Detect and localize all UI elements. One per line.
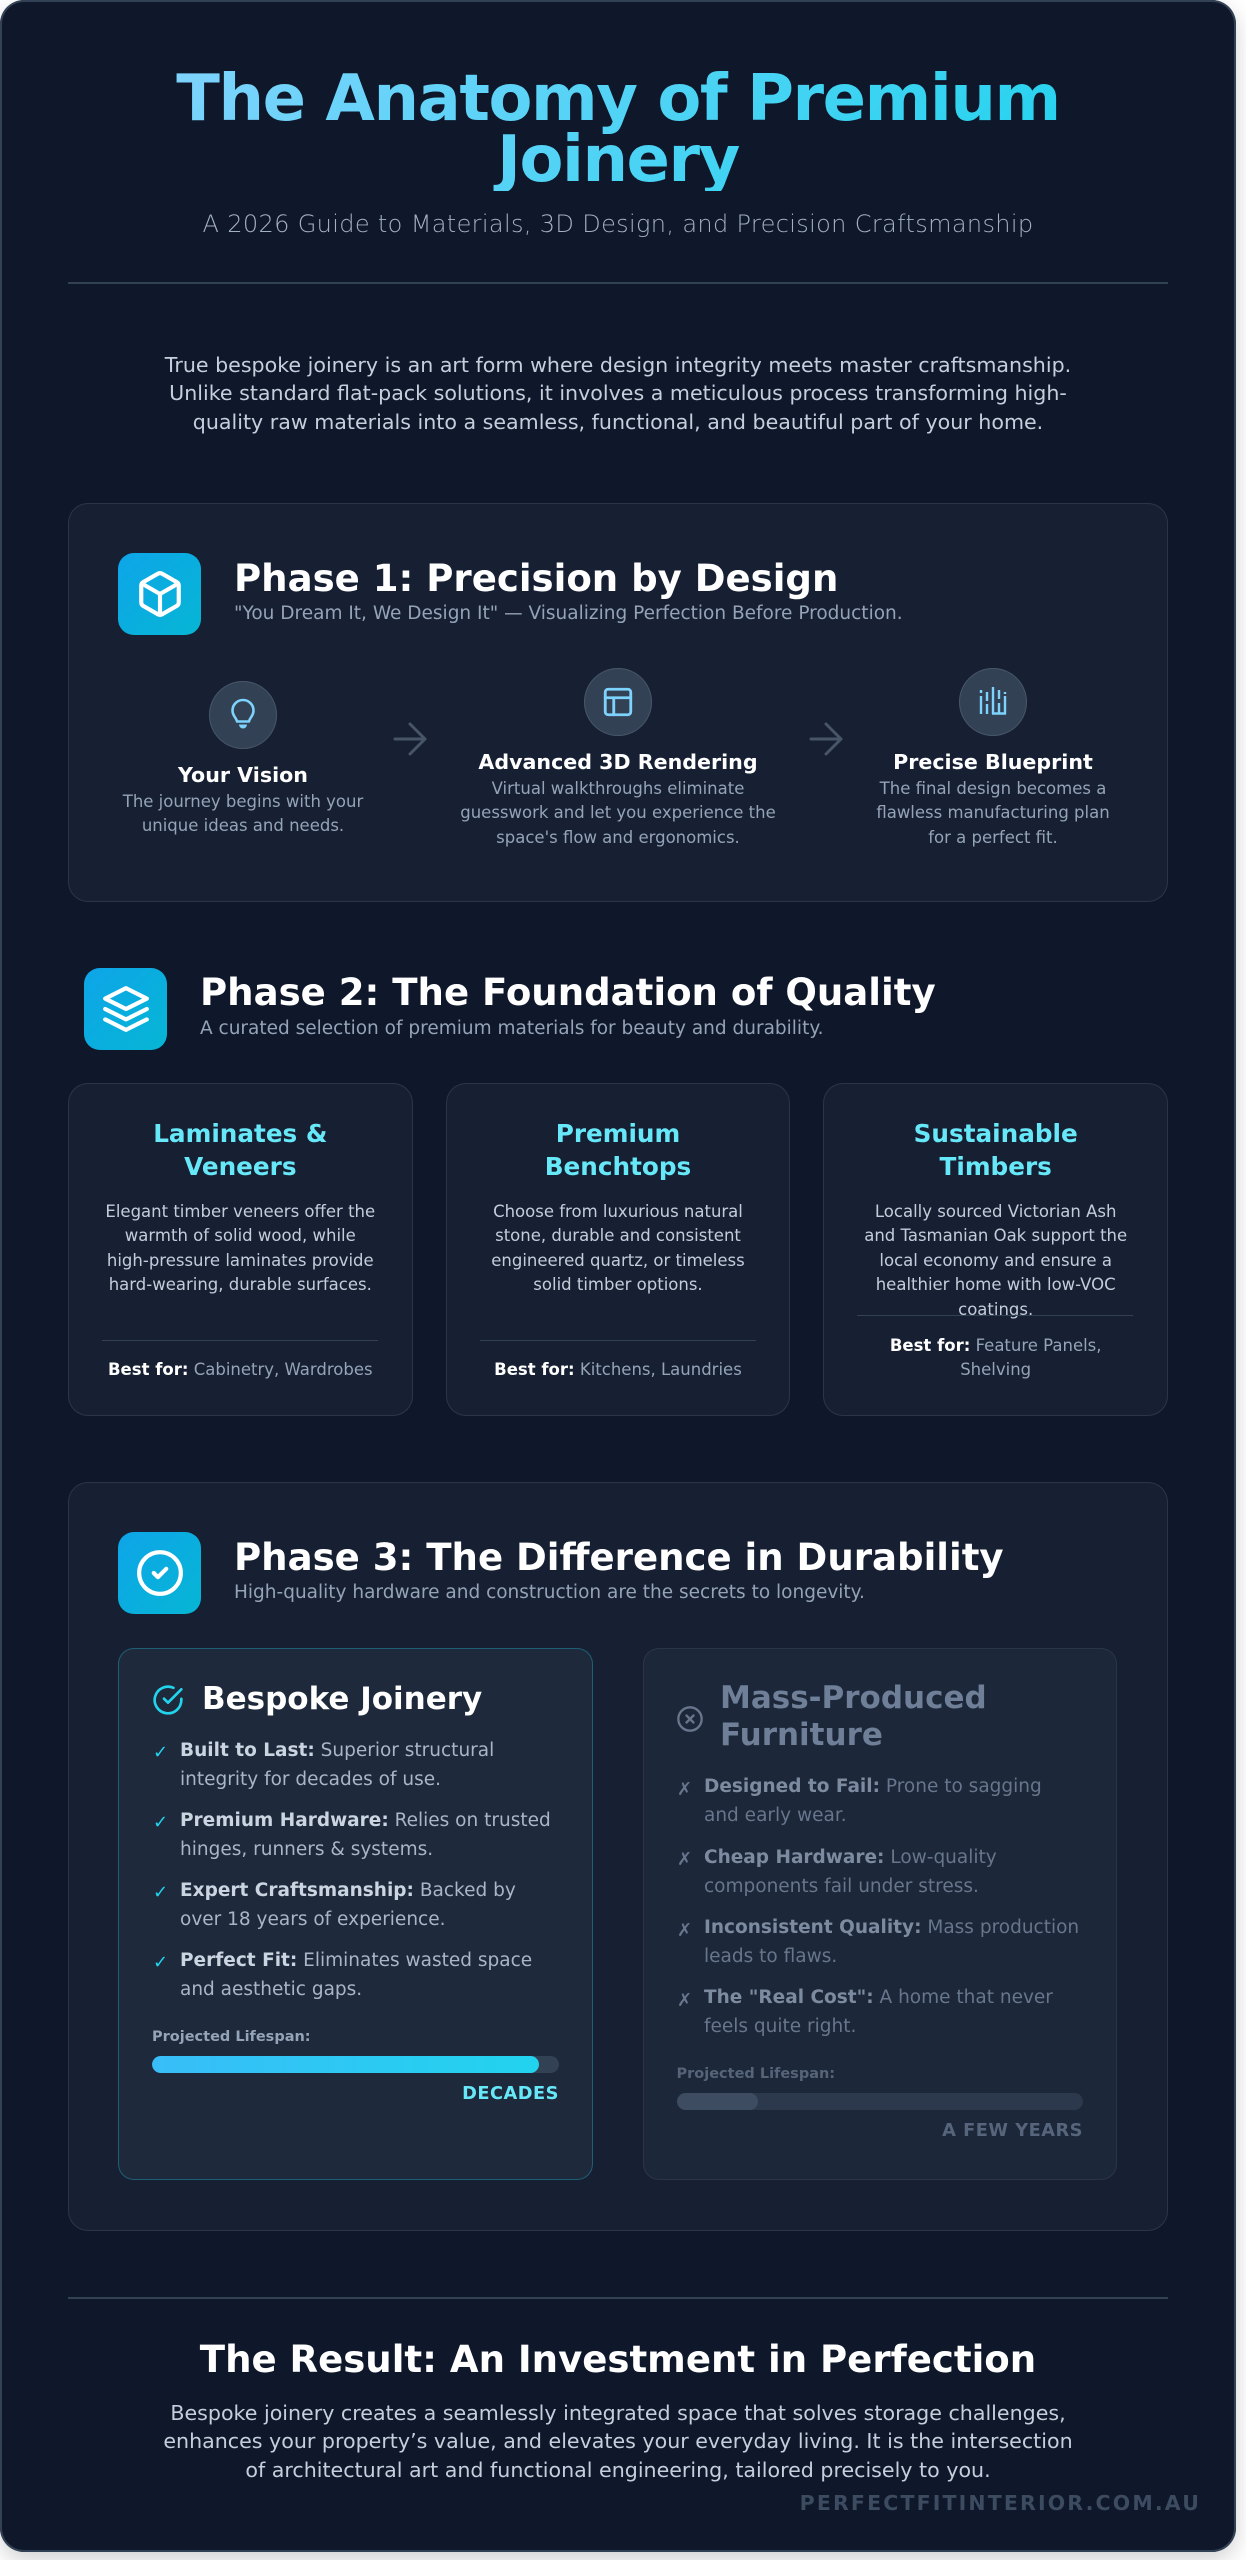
mass-produced list: ✗ (677, 1778, 692, 1800)
icon: check circle (118, 1532, 201, 1614)
icon: blueprint (959, 668, 1027, 736)
title (68, 69, 1168, 191)
phase 1 header (118, 553, 903, 635)
intro text: Unlike standard flat-pack solutions, it involves a meticulous process transforming high- (169, 381, 1067, 405)
step description (460, 779, 776, 847)
conclusion text (163, 2400, 1073, 2482)
card description: warmth of solid wood, while (125, 1226, 356, 1245)
card title (914, 1119, 1078, 1181)
bespoke list: integrity for decades of use. (180, 1769, 441, 1790)
card description: high-pressure laminates provide (107, 1251, 374, 1270)
intro text (164, 352, 1071, 434)
conclusion text: Bespoke joinery creates a seamlessly integrated space that solves storage challenges, (170, 2400, 1066, 2424)
card description: engineered quartz, or timeless (491, 1251, 745, 1270)
card title (545, 1119, 691, 1181)
lifespan bar (152, 2056, 559, 2073)
card description: solid timber options. (533, 1275, 703, 1294)
step description (122, 792, 364, 835)
list item (153, 1810, 551, 1860)
phase 3 subheading: High-quality hardware and construction are the secrets to longevity. (234, 1582, 865, 1603)
title: Joinery (497, 123, 739, 197)
icon: lightbulb (209, 681, 277, 749)
card description: stone, durable and consistent (495, 1226, 741, 1245)
panel: phase 3 (68, 1482, 1168, 2231)
bespoke list: over 18 years of experience. (180, 1909, 445, 1930)
step description: Virtual walkthroughs eliminate (492, 779, 744, 798)
best for: Best for: Feature Panels, (890, 1336, 1102, 1354)
mass-produced list: Cheap Hardware: Low-quality (704, 1847, 997, 1868)
card title: Timbers (940, 1152, 1052, 1181)
step description: unique ideas and needs. (142, 816, 344, 835)
step title: Advanced 3D Rendering (478, 750, 758, 774)
mass-produced heading: Furniture (720, 1717, 883, 1753)
list item (677, 1987, 1053, 2037)
list item (153, 1740, 494, 1790)
step description: for a perfect fit. (928, 828, 1058, 847)
website watermark: PERFECTFITINTERIOR.COM.AU (800, 2491, 1201, 2515)
card description: Locally sourced Victorian Ash (875, 1202, 1116, 1221)
step title: Your Vision (178, 763, 308, 787)
mass-produced list: leads to flaws. (704, 1946, 837, 1967)
lifespan bar (676, 2093, 1083, 2110)
bespoke list: ✓ (153, 1812, 168, 1833)
step description (876, 779, 1110, 847)
bespoke list: Built to Last: Superior structural (180, 1740, 494, 1761)
panel: mass-produced furniture (643, 1648, 1117, 2180)
card description: healthier home with low-VOC (876, 1275, 1116, 1294)
icon: layout (584, 668, 652, 736)
card description: coatings. (958, 1300, 1033, 1319)
mass-produced list: and early wear. (704, 1805, 847, 1826)
card title: Sustainable (914, 1119, 1078, 1148)
phase 2 header (84, 968, 936, 1050)
card description (105, 1202, 375, 1294)
lifespan value: A FEW YEARS (942, 2120, 1083, 2141)
step title: Precise Blueprint (893, 750, 1093, 774)
card description: local economy and ensure a (879, 1251, 1112, 1270)
mass-produced list: components fail under stress. (704, 1876, 979, 1897)
bespoke list: ✓ (153, 1742, 168, 1763)
mass-produced list: feels quite right. (704, 2016, 856, 2037)
card title: Benchtops (545, 1152, 691, 1181)
phase 2 subheading: A curated selection of premium materials for beauty and durability. (200, 1018, 824, 1039)
phase 1 subheading: "You Dream It, We Design It" — Visualizing Perfection Before Production. (234, 603, 903, 624)
icon: bespoke check (153, 1685, 183, 1715)
panel: bespoke joinery (118, 1648, 593, 2180)
card description: hard-wearing, durable surfaces. (109, 1275, 372, 1294)
lifespan label: Projected Lifespan: (152, 2029, 311, 2045)
icon: layers (84, 968, 167, 1050)
panel: sustainable timbers (823, 1083, 1168, 1416)
conclusion text: enhances your property’s value, and elevates your everyday living. It is the intersection (163, 2429, 1073, 2453)
best for (890, 1336, 1102, 1379)
mass-produced heading: Mass-Produced (720, 1680, 987, 1716)
step description: The final design becomes a (880, 779, 1106, 798)
list item (677, 1847, 997, 1897)
card description: and Tasmanian Oak support the (864, 1226, 1127, 1245)
best for: Best for: Cabinetry, Wardrobes (108, 1360, 373, 1378)
mass-produced list: ✗ (677, 1920, 692, 1940)
card title: Veneers (184, 1152, 297, 1181)
phase 2 heading: Phase 2: The Foundation of Quality (200, 971, 936, 1014)
bespoke list: Premium Hardware: Relies on trusted (180, 1810, 551, 1831)
bespoke heading: Bespoke Joinery (202, 1681, 482, 1717)
phase 3 heading: Phase 3: The Difference in Durability (234, 1536, 1004, 1579)
list item (677, 1776, 1042, 1826)
bespoke list: Expert Craftsmanship: Backed by (180, 1880, 516, 1901)
best for: Best for: Kitchens, Laundries (494, 1360, 742, 1378)
panel: phase 1 (68, 503, 1168, 902)
bespoke list: ✓ (153, 1882, 168, 1903)
bespoke list: and aesthetic gaps. (180, 1979, 362, 2000)
best for: Shelving (960, 1360, 1031, 1379)
panel: premium benchtops (446, 1083, 790, 1416)
intro text: True bespoke joinery is an art form where design integrity meets master craftsmanship. (165, 352, 1071, 376)
mass-produced list: ✗ (677, 1849, 692, 1870)
list item (677, 1917, 1079, 1967)
bespoke list: ✓ (153, 1952, 168, 1973)
mass-produced list: Designed to Fail: Prone to sagging (704, 1776, 1042, 1797)
step description: The journey begins with your (123, 792, 363, 811)
list item (153, 1950, 532, 2000)
icon: x circle (677, 1706, 703, 1732)
lifespan label: Projected Lifespan: (676, 2066, 835, 2082)
arrow (810, 722, 842, 756)
conclusion heading: The Result: An Investment in Perfection (200, 2338, 1036, 2381)
arrow (394, 722, 426, 756)
mass-produced list (677, 1776, 1079, 2037)
card title: Laminates & (153, 1119, 327, 1148)
card title (153, 1119, 327, 1181)
list item (153, 1880, 516, 1930)
bespoke list (153, 1740, 551, 2000)
card description (864, 1202, 1127, 1319)
step description: guesswork and let you experience the (460, 803, 776, 822)
mass-produced heading (720, 1680, 987, 1753)
step description: space's flow and ergonomics. (496, 828, 740, 847)
card title: Premium (556, 1119, 680, 1148)
mass-produced list: The "Real Cost": A home that never (704, 1987, 1053, 2008)
title: The Anatomy of Premium (176, 62, 1060, 136)
step: advanced 3d rendering (460, 668, 776, 847)
card description: Choose from luxurious natural (493, 1202, 743, 1221)
phase 1 heading: Phase 1: Precision by Design (234, 557, 838, 600)
bespoke list: Perfect Fit: Eliminates wasted space (180, 1950, 532, 1971)
step: your vision (122, 681, 364, 835)
bespoke list: hinges, runners & systems. (180, 1839, 433, 1860)
card description (491, 1202, 745, 1294)
panel: laminates and veneers (68, 1083, 413, 1416)
icon: cube (118, 553, 201, 635)
lifespan value: DECADES (462, 2083, 559, 2104)
step: precise blueprint (876, 668, 1110, 847)
step description: flawless manufacturing plan (876, 803, 1110, 822)
card description: Elegant timber veneers offer the (105, 1202, 375, 1221)
mass-produced list: Inconsistent Quality: Mass production (704, 1917, 1079, 1938)
subtitle: A 2026 Guide to Materials, 3D Design, and Precision Craftsmanship (203, 210, 1033, 238)
mass-produced list: ✗ (677, 1990, 692, 2010)
intro text: quality raw materials into a seamless, functional, and beautiful part of your home. (193, 410, 1043, 434)
phase 3 header (118, 1532, 1004, 1614)
conclusion text: of architectural art and functional engineering, tailored precisely to you. (245, 2458, 991, 2482)
